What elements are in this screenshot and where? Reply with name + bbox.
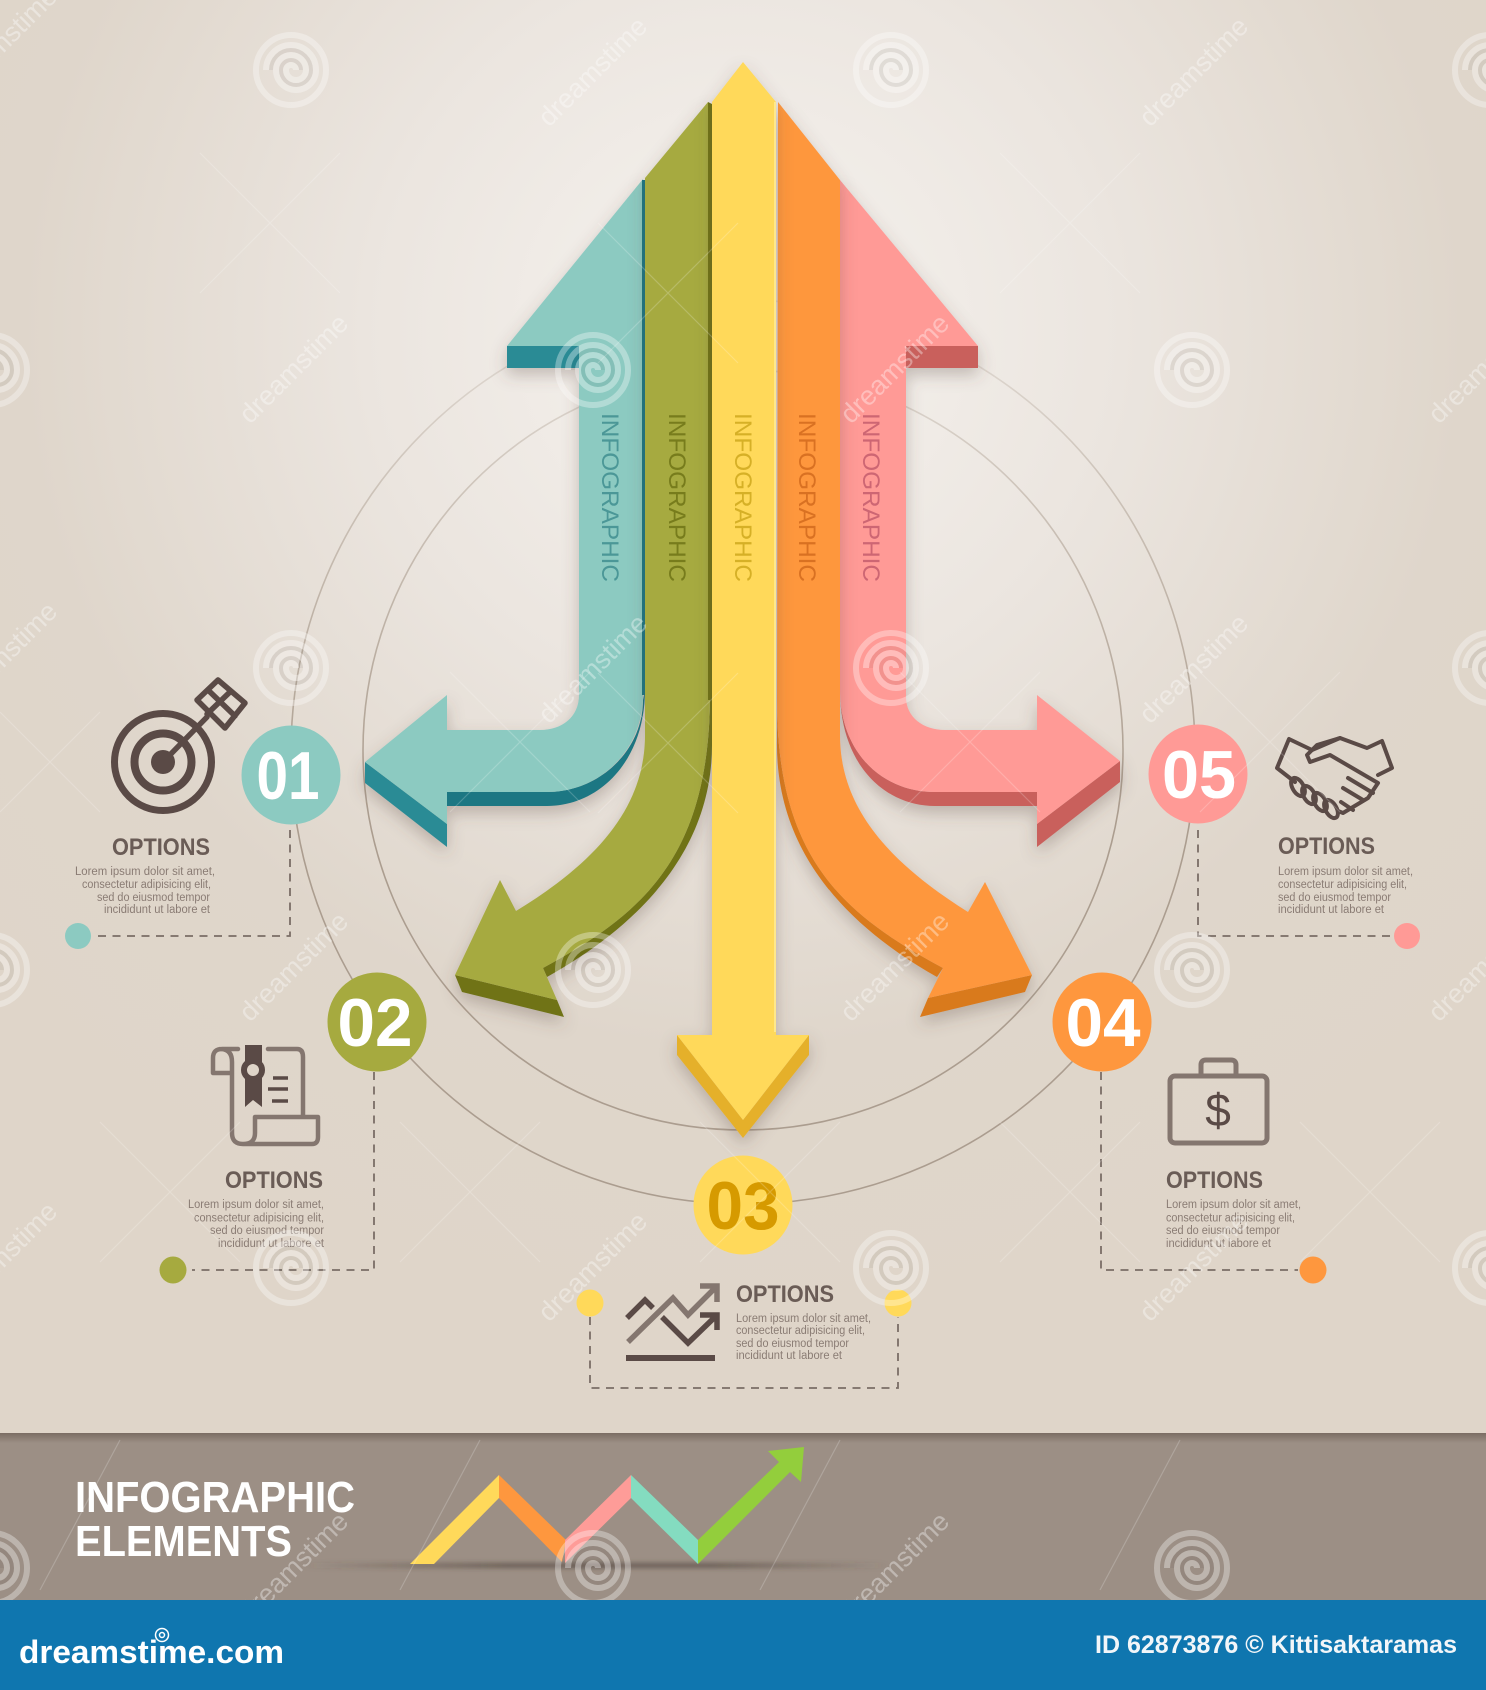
icon: target [114, 680, 245, 810]
credit: ID 62873876 © Kittisaktaramas [1095, 1631, 1457, 1659]
text block: incididunt ut labore et [1278, 904, 1385, 916]
watermark overlay: dreamstime [233, 906, 354, 1027]
panel: option 05 [1148, 724, 1420, 949]
text block [736, 1313, 871, 1362]
dot [1394, 923, 1420, 949]
guide circles [291, 300, 1195, 1204]
arrow 02: olive [455, 102, 712, 1017]
icon: certificate scroll [213, 1045, 318, 1144]
arrow 04: orange [777, 102, 1032, 1017]
watermark overlay: dreamstime [233, 308, 354, 429]
dot right [884, 1290, 912, 1316]
title: ELEMENTS [75, 1517, 292, 1566]
heading: OPTIONS [736, 1281, 834, 1308]
connector [192, 1072, 374, 1270]
connector [590, 1317, 898, 1388]
icon: money briefcase [1170, 1060, 1267, 1143]
arrow 05: pink: INFOGRAPHIC [857, 413, 884, 582]
watermark overlay: dreamstime [1133, 608, 1254, 729]
dot [160, 1256, 186, 1284]
text block: sed do eiusmod tempor [1166, 1225, 1280, 1237]
watermark overlay: dreamstime [1133, 1206, 1254, 1327]
watermark overlay: dreamstime [1133, 11, 1254, 132]
watermark overlay: dreamstime [834, 906, 955, 1027]
badge 05: 05 [1162, 737, 1236, 813]
dot [1300, 1256, 1326, 1284]
text block: incididunt ut labore et [1166, 1238, 1272, 1250]
badge 04 [1052, 972, 1152, 1072]
text block [188, 1199, 325, 1250]
text block: sed do eiusmod tempor [210, 1225, 324, 1237]
title [75, 1473, 355, 1566]
connector [1101, 1072, 1298, 1270]
arrow 03: yellow [677, 62, 809, 1138]
badge 02: 02 [338, 985, 412, 1061]
watermark overlay: dreamstime [532, 11, 653, 132]
arrow 03: yellow: INFOGRAPHIC [729, 413, 756, 582]
central arrow group [365, 62, 1120, 1138]
badge 02 [328, 972, 426, 1072]
badge 01 [242, 726, 340, 824]
text block: consectetur adipisicing elit, [1278, 879, 1407, 891]
site name: dreamstime.com [19, 1634, 284, 1670]
title: INFOGRAPHIC [75, 1473, 355, 1522]
heading: OPTIONS [112, 834, 210, 861]
badge 04: 04 [1066, 985, 1141, 1061]
watermark overlay: dreamstime [532, 608, 653, 729]
arrow 01: teal [365, 179, 645, 847]
icon: money briefcase: $ [1205, 1084, 1231, 1136]
arrow 04: orange: INFOGRAPHIC [793, 413, 820, 582]
text block: sed do eiusmod tempor [1278, 892, 1391, 904]
arrow 02: olive: INFOGRAPHIC [663, 413, 690, 582]
connector [1198, 830, 1392, 936]
badge 05 [1148, 724, 1248, 824]
arrow 05: pink [840, 180, 1120, 847]
text block: incididunt ut labore et [736, 1350, 843, 1362]
text block: Lorem ipsum dolor sit amet, [1166, 1199, 1301, 1211]
panel: option 04 [1052, 972, 1326, 1284]
footer bar [0, 1600, 1486, 1690]
zigzag arrow [410, 1447, 804, 1564]
badge 01: 01 [256, 738, 320, 814]
heading: OPTIONS [225, 1167, 323, 1194]
logo mark [156, 1628, 168, 1642]
text block: Lorem ipsum dolor sit amet, [1278, 866, 1413, 878]
text block: incididunt ut labore et [218, 1238, 325, 1250]
arrow 01: teal: INFOGRAPHIC [596, 413, 623, 582]
dot left [576, 1290, 604, 1316]
watermark overlay: dreamstime [834, 1506, 955, 1627]
panel: option 02 [160, 972, 426, 1284]
heading: OPTIONS [1278, 833, 1375, 860]
heading: OPTIONS [1166, 1167, 1263, 1194]
icon: trend chart [626, 1286, 717, 1361]
watermark overlay: dreamstime [532, 1206, 653, 1327]
icon: handshake [1277, 738, 1392, 820]
text block: consectetur adipisicing elit, [1166, 1212, 1295, 1224]
text block: incididunt ut labore et [104, 904, 211, 916]
text block: Lorem ipsum dolor sit amet, [736, 1313, 871, 1325]
text block [1278, 866, 1413, 916]
dot [65, 923, 91, 949]
text block: sed do eiusmod tempor [97, 892, 210, 904]
text block: Lorem ipsum dolor sit amet, [75, 866, 215, 878]
badge 03 [694, 1156, 792, 1254]
text block: sed do eiusmod tempor [736, 1338, 849, 1350]
text block: consectetur adipisicing elit, [82, 879, 211, 891]
panel: option 03 [576, 1156, 912, 1388]
watermark overlay: dreamstime [233, 1506, 354, 1627]
text block: consectetur adipisicing elit, [194, 1212, 324, 1224]
connector [95, 830, 290, 936]
text block [75, 866, 215, 916]
watermark overlay: dreamstime [834, 308, 955, 429]
bottom band [0, 1433, 1486, 1600]
text block [1166, 1199, 1301, 1250]
badge 03: 03 [706, 1168, 780, 1244]
text block: consectetur adipisicing elit, [736, 1325, 865, 1337]
panel: option 01 [65, 680, 340, 949]
text block: Lorem ipsum dolor sit amet, [188, 1199, 324, 1211]
